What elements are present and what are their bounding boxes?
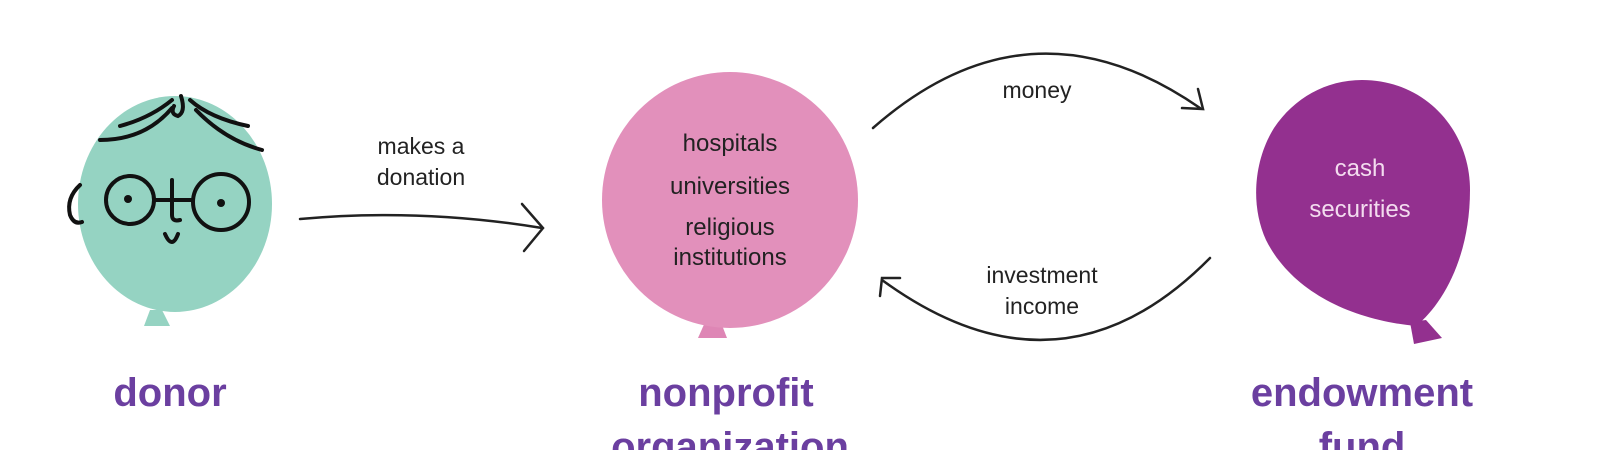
label: investment income: income <box>1005 293 1079 319</box>
text: nonprofit types: universities <box>670 173 790 200</box>
text: nonprofit types: hospitals <box>683 130 777 157</box>
title: donor: donor <box>113 371 227 415</box>
title: endowment fund <box>1251 371 1473 450</box>
label: makes a donation: makes a <box>378 133 465 159</box>
label: investment income <box>986 262 1098 319</box>
arrow: investment income <box>880 258 1210 340</box>
text: endowment contents: cash <box>1335 155 1385 182</box>
icon: endowment balloon <box>1256 80 1470 344</box>
text: nonprofit types <box>670 130 790 271</box>
title: nonprofit organization: nonprofit <box>638 371 814 415</box>
arrow: money <box>873 54 1203 128</box>
label: investment income: investment <box>986 262 1098 288</box>
label: money: money <box>1002 77 1072 103</box>
text: nonprofit types: institutions <box>673 244 787 271</box>
icon: donor balloon face <box>69 96 272 326</box>
icon: nonprofit balloon <box>602 72 858 338</box>
text: endowment contents: securities <box>1309 196 1411 223</box>
label: makes a donation <box>377 133 465 190</box>
text: nonprofit types: religious <box>685 214 775 241</box>
title: nonprofit organization <box>611 371 849 450</box>
text: endowment contents <box>1309 155 1411 223</box>
arrow: donation <box>300 204 543 251</box>
title: endowment fund: endowment <box>1251 371 1473 415</box>
label: makes a donation: donation <box>377 164 465 190</box>
